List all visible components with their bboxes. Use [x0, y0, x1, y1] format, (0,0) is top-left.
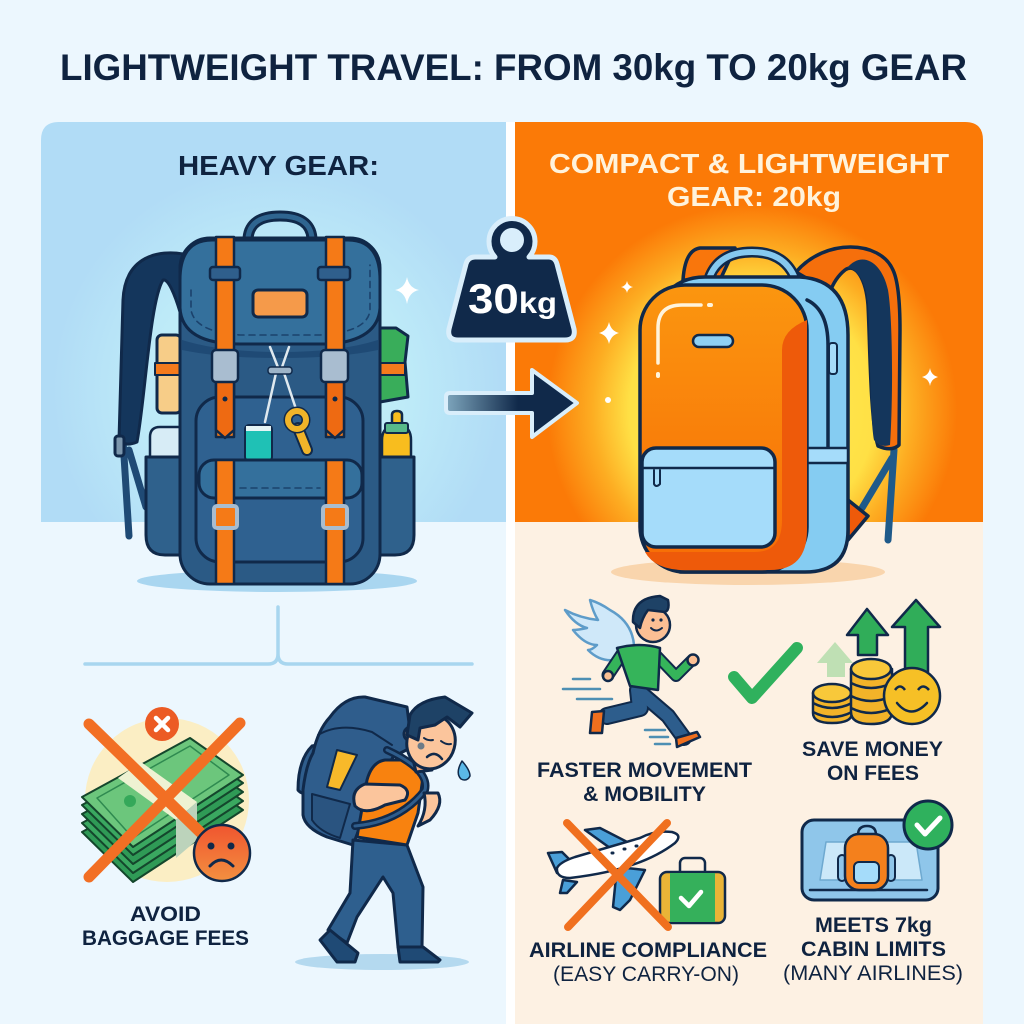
text: faster movement and mobility: & MOBILITY [583, 783, 706, 806]
arrow: from heavy to light [446, 370, 577, 437]
icon: light backpack [611, 247, 900, 585]
icon: coins, arrows and smiley [813, 600, 940, 724]
icon: plane crossed out with suitcase [548, 823, 725, 927]
text: meets 7kg cabin limits: CABIN LIMITS [801, 938, 946, 961]
text: save money on fees [802, 738, 943, 785]
icon: sparkle near heavy backpack [395, 277, 419, 304]
icon: green check [734, 648, 797, 698]
text: save money on fees: SAVE MONEY [802, 738, 943, 761]
text: meets 7kg cabin limits: MEETS 7kg [815, 914, 932, 937]
text: avoid baggage fees: AVOID [130, 903, 201, 926]
icon: 30kg weight: 30kg [468, 275, 557, 322]
sad face [194, 825, 250, 881]
icon: 30kg weight [449, 219, 574, 340]
text: save money on fees: ON FEES [827, 762, 919, 785]
text: airline compliance: (EASY CARRY-ON) [553, 963, 739, 986]
text: faster movement and mobility [537, 759, 752, 806]
icon: running person with wings [563, 596, 700, 747]
text: avoid baggage fees [82, 903, 249, 950]
title: LIGHTWEIGHT TRAVEL: FROM 30kg TO 20kg GEAR [60, 47, 967, 88]
icon: tired traveller [295, 697, 472, 970]
text: meets 7kg cabin limits: (MANY AIRLINES) [783, 962, 963, 985]
heading: compact and lightweight gear: GEAR: 20kg [667, 181, 841, 212]
red x badge [145, 707, 179, 741]
icon: cabin bin with backpack [802, 801, 952, 900]
heading: compact and lightweight gear: COMPACT & LIGHTWEIGHT [549, 148, 949, 179]
icon: sparkles around light backpack [599, 281, 938, 403]
heading: compact and lightweight gear [549, 148, 949, 212]
connector line [85, 607, 472, 664]
text: avoid baggage fees: BAGGAGE FEES [82, 927, 249, 950]
heading: heavy gear: HEAVY GEAR: [178, 150, 379, 181]
text: airline compliance: AIRLINE COMPLIANCE [529, 939, 767, 962]
text: faster movement and mobility: FASTER MOVEMENT [537, 759, 752, 782]
text: airline compliance [529, 939, 767, 986]
icon: heavy backpack [115, 216, 417, 592]
icon: money stack with no symbol [82, 707, 250, 882]
text: meets 7kg cabin limits [783, 914, 963, 985]
